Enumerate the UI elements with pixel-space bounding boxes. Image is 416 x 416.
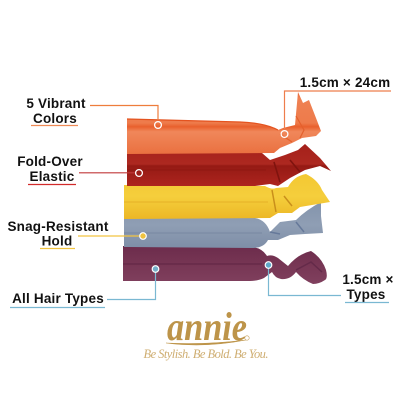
hair tie: red: [127, 144, 331, 186]
callout: 1.5cm x 24cm: [281, 75, 391, 137]
callout: Snag-Resistant Hold: Hold: [42, 234, 72, 248]
hair tie: slate blue: [124, 202, 323, 248]
callout: 5 Vibrant Colors: 5 Vibrant: [26, 96, 86, 111]
callout: 1.5cm x Types: [265, 262, 394, 302]
callout: Fold-Over Elastic: [17, 154, 142, 184]
callout: Snag-Resistant Hold: Snag-Resistant: [7, 219, 109, 234]
callout: 5 Vibrant Colors: Colors: [33, 111, 77, 126]
hair tie: yellow: [124, 174, 330, 219]
callout: 1.5cm x Types: 1.5cm ×: [342, 272, 394, 287]
callout: Snag-Resistant Hold: [7, 219, 146, 248]
callout: All Hair Types: [10, 266, 159, 308]
hair tie: orange: [127, 92, 321, 154]
callout: All Hair Types: All Hair Types: [12, 291, 104, 306]
callout: 5 Vibrant Colors: [26, 96, 161, 128]
callout: 1.5cm x 24cm: 1.5cm × 24cm: [300, 75, 390, 90]
hair tie: plum: [123, 246, 327, 284]
tagline: Be Stylish. Be Bold. Be You.: [144, 347, 268, 361]
callout: Fold-Over Elastic: Elastic: [30, 169, 75, 184]
logo: Annie: annie: [167, 304, 247, 349]
callout: 1.5cm x Types: Types: [346, 287, 386, 302]
callout: Fold-Over Elastic: Fold-Over: [17, 154, 83, 169]
